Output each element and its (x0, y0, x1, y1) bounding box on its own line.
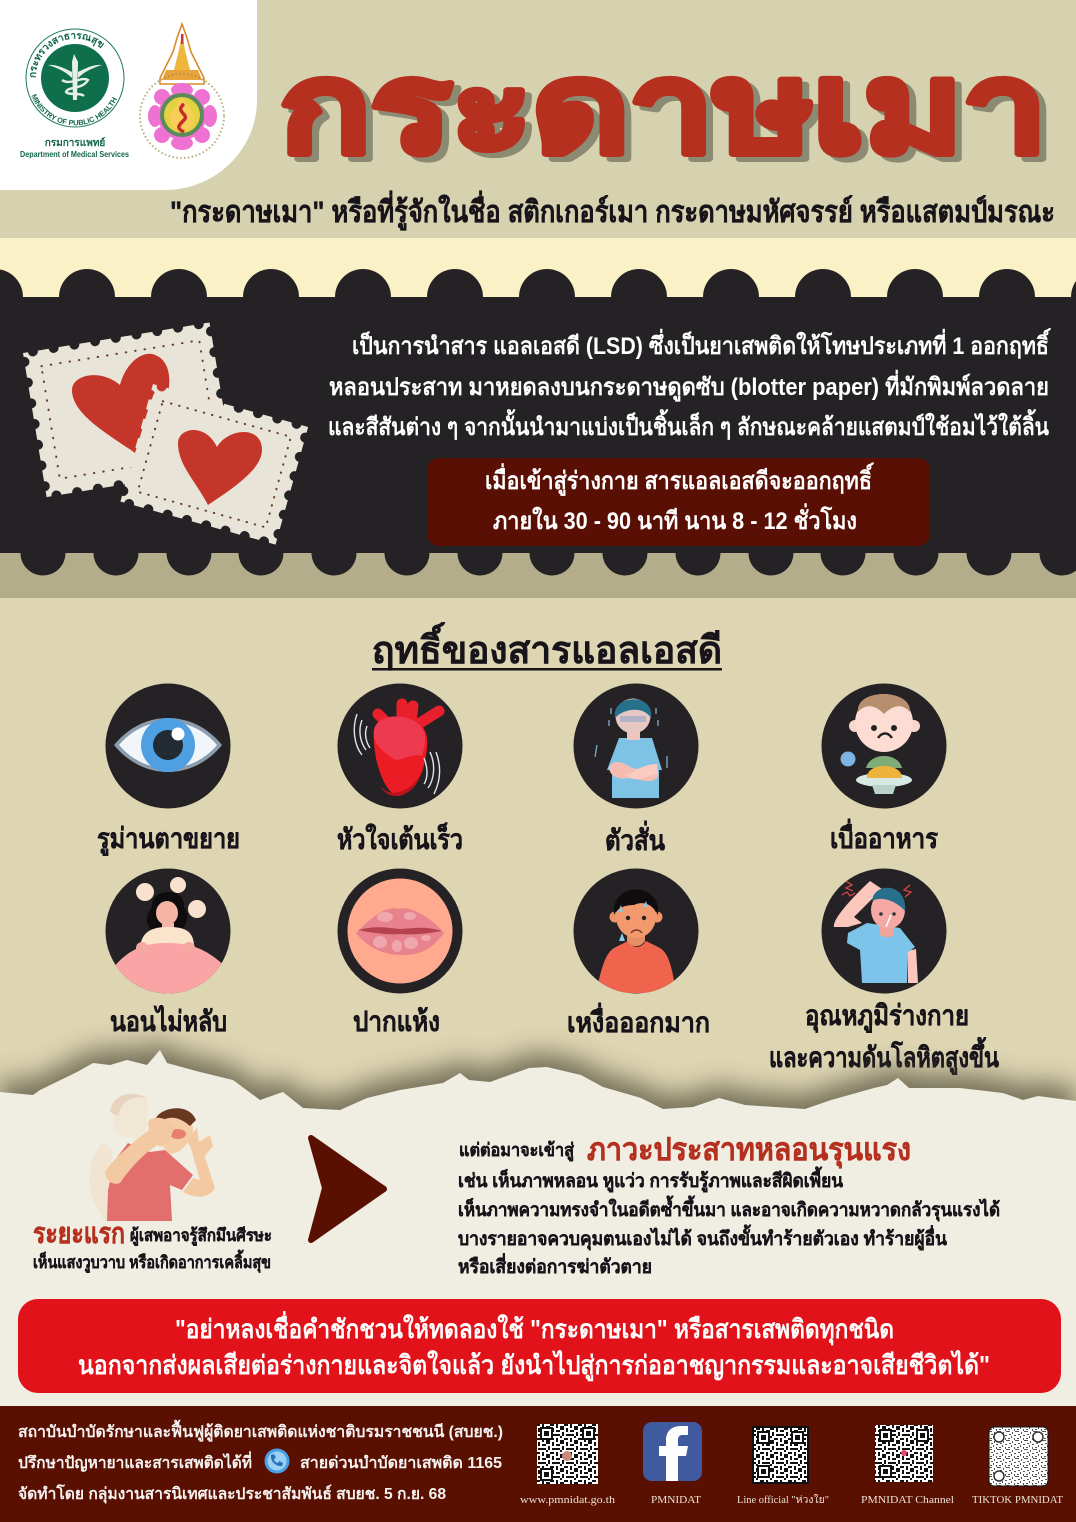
description text (328, 328, 1051, 441)
panel: LSD description band (0, 238, 1076, 598)
footer contact text: สถาบันบำบัดรักษาและฟื้นฟูผู้ติดยาเสพติดแห่งชาติบรมราชชนนี (สบยช.) (18, 1419, 503, 1443)
warning banner: นอกจากส่งผลเสียต่อร่างกายและจิตใจแล้ว ยังนำไปสู่การก่ออาชญากรรมและอาจเสียชีวิตได้" (78, 1349, 990, 1382)
logo: Ministry of Public Health (20, 28, 130, 159)
head (157, 1114, 193, 1154)
illustration: man with blurred vision (90, 1093, 215, 1221)
symptom: appetite loss (822, 684, 946, 854)
symptom: dry mouth: ปากแห้ง (353, 1006, 440, 1037)
logo: Ministry of Public Health: Department of Medical Services (20, 150, 130, 159)
icon: dry lips (348, 878, 452, 984)
onset callout: เมื่อเข้าสู่ร่างกาย สารแอลเอสดีจะออกฤทธิ์ (485, 463, 874, 496)
header band (0, 0, 1076, 238)
symptom: fever and high blood pressure: อุณหภูมิร่างกาย (805, 1000, 969, 1033)
symptom: fast heartbeat: หัวใจเต้นเร็ว (337, 822, 463, 855)
footer (0, 1406, 1076, 1522)
stage two text: บางรายอาจควบคุมตนเองไม่ได้ จนถึงขั้นทำร้ายตัวเอง ทำร้ายผู้อื่น (458, 1224, 947, 1251)
logo: Ministry of Public Health: กรมการแพทย์ (45, 137, 105, 149)
QR: TikTok (972, 1427, 1063, 1506)
QR: PMNIDAT Channel (861, 1425, 954, 1506)
dark perforated band (0, 269, 1076, 576)
symptom: dry mouth (338, 868, 462, 1037)
torn paper shadow (0, 1036, 1076, 1140)
logo panel (0, 0, 257, 190)
stamp two (120, 384, 308, 545)
symptom: heavy sweating (567, 868, 710, 1038)
QR: Line official: Line official "ห่วงใย" (737, 1494, 829, 1506)
stage two text: เห็นภาพความทรงจำในอดีตซ้ำขึ้นมา และอาจเกิดความหวาดกลัวรุนแรงได้ (458, 1195, 1000, 1222)
left arm (105, 1128, 162, 1184)
stage one text: เห็นแสงวูบวาบ หรือเกิดอาการเคลิ้มสุข (33, 1249, 271, 1274)
warning banner: "อย่าหลงเชื่อคำชักชวนให้ทดลองใช้ "กระดาษเมา" หรือสารเสพติดทุกชนิด (175, 1310, 894, 1346)
section heading: ฤทธิ์ของสารแอลเอสดี (372, 622, 722, 672)
symptom: heavy sweating: เหงื่อออกมาก (567, 1002, 710, 1038)
logo: Ministry of Public Health: MINISTRY OF PUBLIC HEALTH (32, 94, 117, 126)
stage two text: แต่ต่อมาจะเข้าสู่ (459, 1140, 575, 1162)
logo: PMNIDAT lotus (140, 24, 224, 158)
QR: Line official (737, 1426, 829, 1506)
stage two text: เช่น เห็นภาพหลอน หูแว่ว การรับรู้ภาพและสีผิดเพี้ยน (458, 1166, 843, 1193)
footer contact text: จัดทำโดย กลุ่มงานสารนิเทศและประชาสัมพันธ์ สบยช. 5 ก.ย. 68 (18, 1483, 446, 1504)
stage two text (458, 1132, 1000, 1278)
right arm (183, 1145, 215, 1197)
cream strip (0, 238, 1076, 300)
symptom: insomnia (106, 868, 230, 1032)
icon: shivering person (595, 698, 667, 798)
stage two text: ภาวะประสาทหลอนรุนแรง (587, 1132, 911, 1169)
icon: woman under blanket (116, 877, 222, 994)
icon: sweating person (596, 890, 676, 993)
icon: heart stamps (23, 322, 308, 545)
stage two text: หรือเสี่ยงต่อการฆ่าตัวตาย (458, 1253, 652, 1278)
lower olive strip (0, 552, 1076, 598)
icon: Facebook: PMNIDAT (651, 1495, 701, 1506)
icon: phone (264, 1448, 290, 1474)
title: กระดาษเมา (280, 40, 1047, 178)
ghost figure (90, 1093, 148, 1220)
symptom: shaking: ตัวสั่น (605, 820, 665, 856)
stamp one (23, 322, 233, 497)
symptom: dilated pupils: รูม่านตาขยาย (97, 823, 240, 856)
symptom: fast heartbeat (337, 684, 463, 855)
symptom: insomnia: นอนไม่หลับ (110, 1005, 227, 1037)
QR: TikTok: TIKTOK PMNIDAT (972, 1495, 1063, 1506)
symptom: dilated pupils (97, 684, 240, 856)
symptom: shaking (574, 684, 698, 856)
icon: Facebook (643, 1422, 702, 1506)
footer contact text: ปรึกษาปัญหายาและสารเสพติดได้ที่ (18, 1451, 252, 1473)
logo: Ministry of Public Health: กระทรวงสาธารณสุข (30, 33, 104, 78)
warning banner (18, 1299, 1061, 1393)
icon: heart organ (354, 704, 440, 796)
arrow (311, 1138, 384, 1240)
onset callout (427, 458, 930, 546)
QR: website (520, 1424, 615, 1506)
panel: torn paper stages (0, 1050, 1076, 1406)
footer contact text (18, 1419, 503, 1504)
symptom: fever and high blood pressure (769, 868, 999, 1075)
stage one text (33, 1218, 272, 1274)
stage one text: ระยะแรก (33, 1218, 125, 1250)
shirt (107, 1143, 193, 1221)
icon: feverish person (834, 881, 918, 983)
stage one text: ผู้เสพอาจรู้สึกมึนศีรษะ (130, 1225, 272, 1247)
symptom: fever and high blood pressure: และความดันโลหิตสูงขึ้น (769, 1036, 999, 1075)
QR: website: www.pmnidat.go.th (520, 1495, 615, 1506)
QR: PMNIDAT Channel: PMNIDAT Channel (861, 1495, 954, 1506)
onset callout: ภายใน 30 - 90 นาที นาน 8 - 12 ชั่วโมง (493, 503, 857, 535)
symptom: appetite loss: เบื่ออาหาร (830, 818, 938, 854)
icon: boy with food (840, 694, 920, 794)
icon: eye (114, 718, 222, 772)
footer contact text: สายด่วนบำบัดยาเสพติด 1165 (300, 1454, 502, 1472)
